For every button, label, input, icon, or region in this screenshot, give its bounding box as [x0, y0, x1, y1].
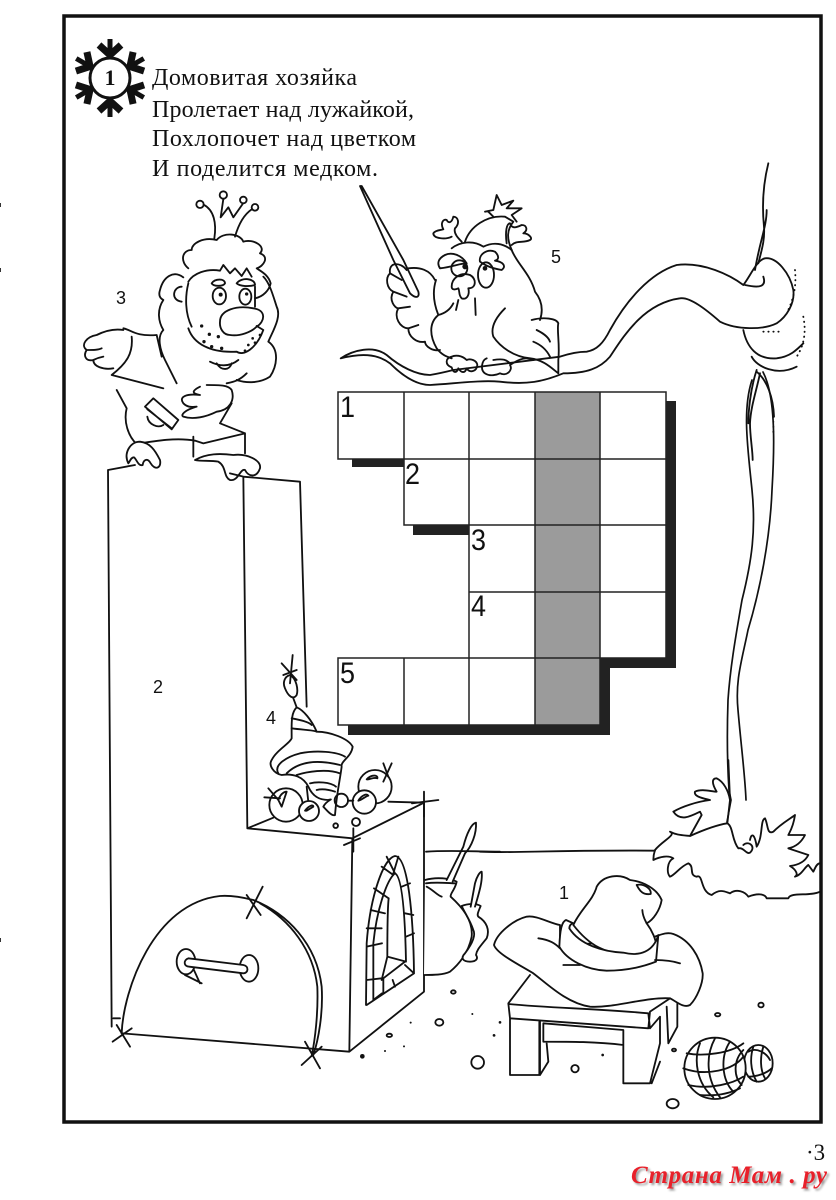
- clue numbers: 2: [405, 458, 420, 491]
- ground horizon: [426, 848, 500, 854]
- icon: snowflake badge with number 1: [71, 39, 149, 117]
- big clay jug: [424, 878, 472, 975]
- owl with pointer: [360, 186, 559, 375]
- spoon in jug: [447, 823, 476, 882]
- crossword grid: [338, 391, 676, 735]
- crossword drop shadow: [348, 401, 676, 735]
- ground line: [480, 851, 655, 852]
- clue numbers: 4: [471, 590, 486, 623]
- lion robe and crossed hands: [137, 373, 247, 457]
- riddle poem: Пролетает над лужайкой,: [152, 97, 414, 123]
- ground pebbles: [360, 990, 495, 1069]
- stove corner marks: [113, 792, 438, 1068]
- stove outline: [108, 465, 424, 1052]
- apples: [264, 763, 392, 828]
- riddle poem: Домовитая хозяйка: [152, 65, 357, 91]
- clue numbers: 3: [471, 524, 486, 557]
- picture numbers: 4: [266, 708, 276, 728]
- lion arm and paw: [84, 328, 163, 444]
- stool: [508, 975, 677, 1083]
- picture numbers: 2: [153, 677, 163, 697]
- owl wing: [387, 264, 440, 350]
- hat crown: [573, 876, 662, 955]
- lion king: [84, 191, 278, 480]
- door handle: [177, 949, 258, 982]
- riddle poem: И поделится медком.: [152, 156, 378, 182]
- lion mane and hair: [159, 235, 278, 383]
- bark speckles: [763, 270, 805, 433]
- icon: snowflake badge with number 1: 1: [104, 65, 116, 90]
- picture numbers: [116, 247, 569, 903]
- stove door: [122, 896, 322, 1056]
- picture numbers: 3: [116, 288, 126, 308]
- spinning top: [271, 655, 353, 815]
- hat brim: [494, 916, 703, 1007]
- owl feet: [447, 356, 533, 375]
- riddle poem: [152, 65, 416, 182]
- tree and owl branch: [341, 163, 805, 460]
- clue numbers: 1: [340, 391, 355, 424]
- ground pebbles right: [493, 1003, 764, 1108]
- page number: ·3: [806, 1140, 825, 1165]
- clue numbers: [340, 391, 486, 690]
- pointer: [360, 186, 419, 297]
- clue numbers: 5: [340, 657, 355, 690]
- lion face: [188, 279, 263, 369]
- highlighted answer column: [535, 392, 600, 725]
- yarn balls: [683, 1038, 773, 1099]
- tree lower trunk: [727, 372, 774, 822]
- crown: [196, 191, 258, 238]
- hat band: [559, 920, 658, 971]
- tree branch: [341, 258, 794, 385]
- picture numbers: 1: [559, 883, 569, 903]
- brick arch window: [366, 856, 414, 1005]
- tile stove: [108, 465, 500, 1069]
- small jug: [462, 904, 488, 962]
- tree upper trunk: [743, 163, 803, 460]
- owl body: [431, 250, 559, 373]
- owl face: [438, 242, 512, 270]
- lion feet: [127, 442, 260, 480]
- scan marks on left edge: [0, 203, 1, 942]
- picture numbers: 5: [551, 247, 561, 267]
- riddle poem: Похлопочет над цветком: [152, 126, 416, 152]
- watermark: Страна Мам . ру: [631, 1162, 828, 1189]
- crossword cells: [338, 392, 666, 725]
- owl hat and bows: [433, 195, 531, 250]
- bush at tree foot: [653, 760, 820, 898]
- stool, hat and balls scene: [480, 760, 820, 1108]
